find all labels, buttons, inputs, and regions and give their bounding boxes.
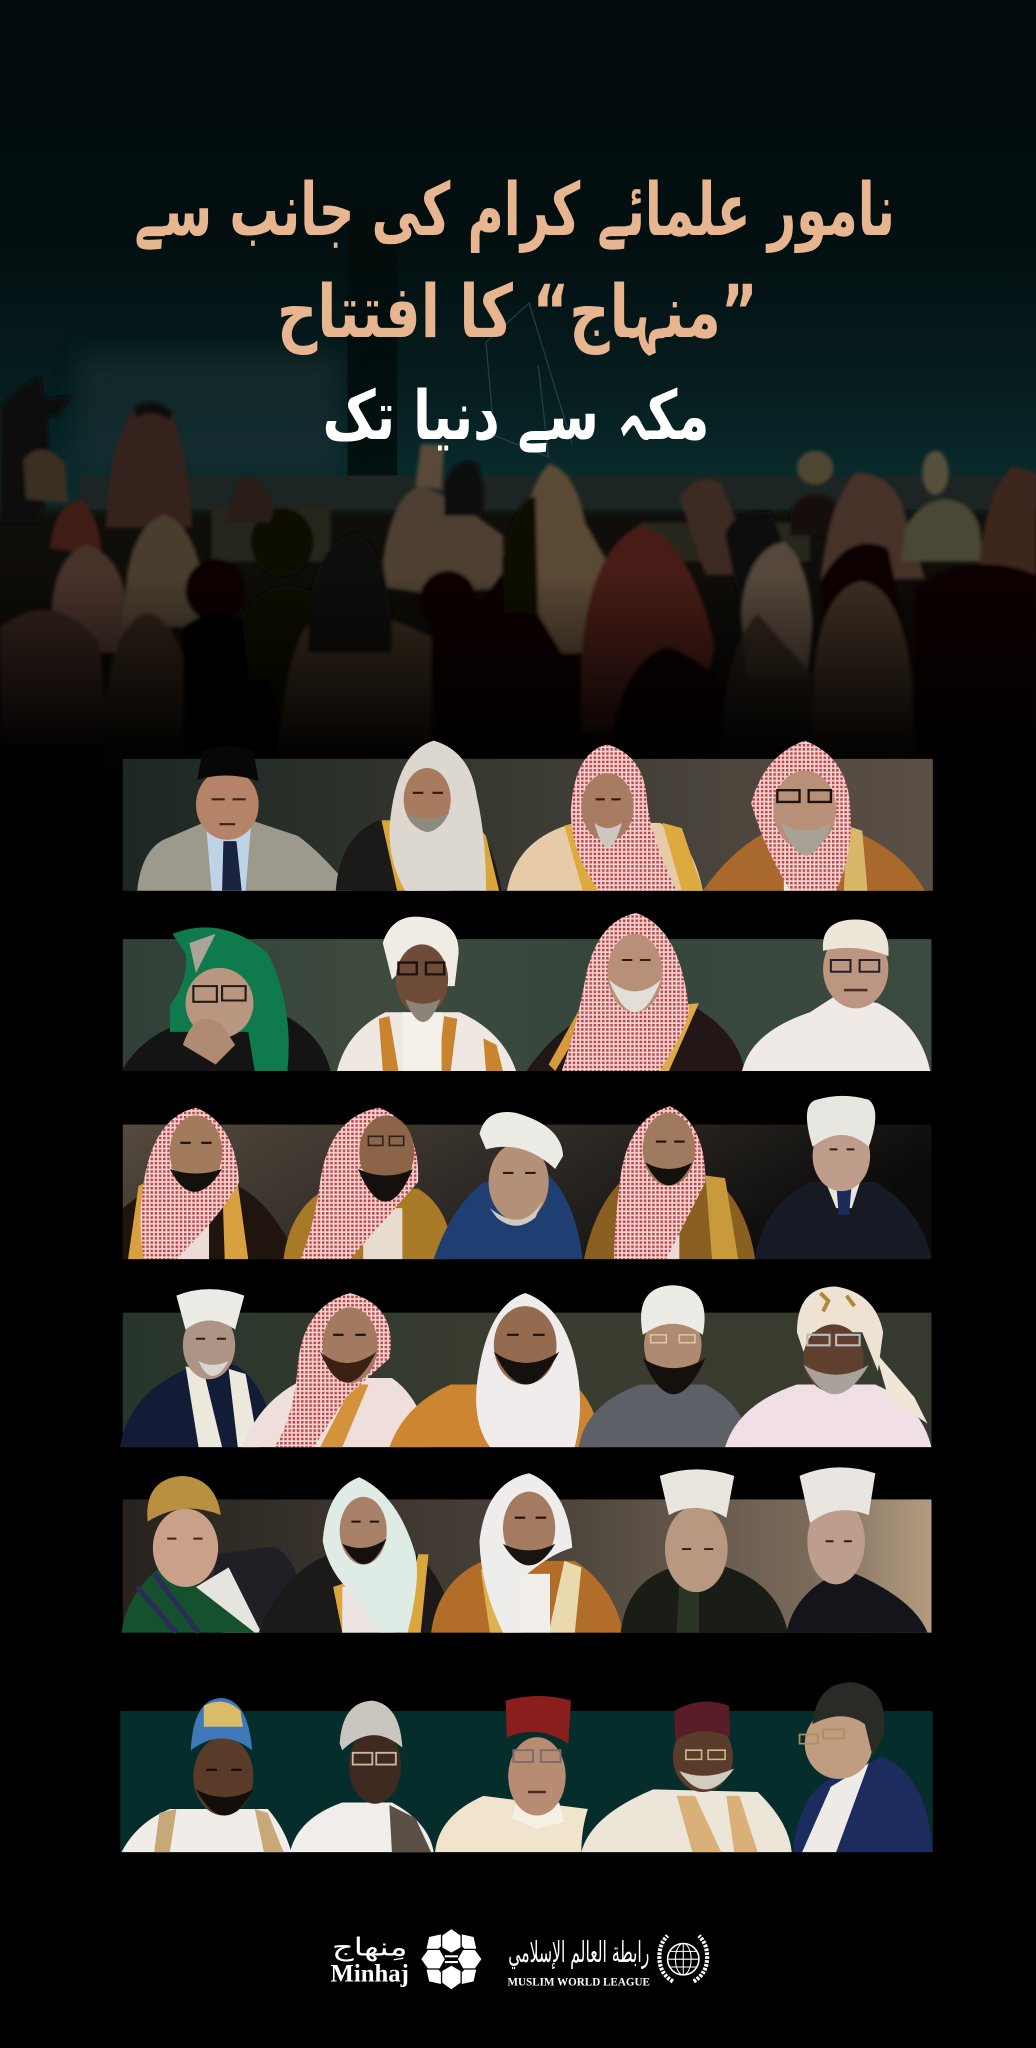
icon: Minhaj rosette: [421, 1929, 481, 1989]
scholar: red shemagh, glasses, brown robe: [703, 741, 925, 891]
scholar: cream cap, white robe: [742, 920, 930, 1071]
scholar: gold cap, green striped wrap: [121, 1476, 298, 1633]
scholar: grey hair, navy suit: [793, 1682, 933, 1852]
portrait row 5: [121, 1467, 931, 1633]
logo: Muslim World League: [508, 1935, 707, 1988]
icon: globe and wreath: [659, 1936, 707, 1981]
scholar: red shemagh, white beard: [526, 913, 745, 1071]
scholar: shemagh, black robe: [123, 1108, 298, 1259]
scholar: patterned turban, white robe, grey beard: [725, 1287, 931, 1447]
portrait row 4: [120, 1285, 931, 1447]
title line 2: ”منہاج“ کا افتتاح: [277, 270, 758, 356]
scholar: red fez, cream robe: [435, 1696, 588, 1852]
hero background: conference hall: [0, 0, 1036, 784]
right seated group: [797, 451, 834, 485]
scholar: white ghutra, orange robe: [431, 1473, 623, 1633]
scholar: black cap, grey suit: [137, 746, 353, 891]
scholar: white ghutra, black robe: [336, 741, 502, 891]
Minhaj Arabic wordmark: مِنهاج: [332, 1932, 408, 1962]
scholar: white hat, black suit: [755, 1096, 931, 1259]
scholar: white ghutra, orange robe: [389, 1293, 599, 1447]
bottom fade to black: [0, 575, 1036, 784]
left camera operator: [0, 376, 72, 522]
portrait row 2: [121, 913, 931, 1071]
MWL Arabic calligraphy: رابطة العالم الإسلامي: [508, 1935, 649, 1970]
scholar: white hat, black coat: [786, 1467, 928, 1633]
scholar: shemagh, gold robe: [584, 1106, 755, 1259]
portrait row 6: [120, 1682, 933, 1852]
Minhaj Latin wordmark: Minhaj: [331, 1960, 409, 1987]
MWL Latin wordmark: MUSLIM WORLD LEAGUE: [508, 1974, 650, 1988]
scholar: blue and yellow cap, tan bands: [121, 1698, 291, 1852]
scholar: green turban, hand on chin: [121, 927, 331, 1071]
audience silhouettes: [0, 376, 1036, 771]
scholar: grey cap, white robe: [290, 1701, 434, 1852]
scholar: white turban, blue robe: [434, 1112, 583, 1259]
subtitle: مکہ سے دنیا تک: [323, 377, 709, 456]
standing man: [106, 402, 192, 528]
centre seated group: [383, 486, 503, 594]
scholar: shemagh, white robe, brown beard: [242, 1293, 431, 1447]
portrait row 3: [123, 1096, 931, 1259]
scholar: white hat, navy coat, white scarf: [120, 1289, 277, 1447]
scholar: white hat, dark green coat: [621, 1469, 788, 1633]
scholar: white turban, grey robe, black beard: [579, 1285, 751, 1447]
scholar: white ghutra, black robe: [259, 1477, 452, 1633]
scholar: shemagh, gold robe, glasses: [283, 1108, 453, 1259]
logo: Minhaj: [331, 1929, 481, 1989]
stage floor: [78, 475, 1036, 509]
scholar: maroon cap, grey beard, cream robe: [581, 1702, 792, 1852]
scholar: white turban, white and orange robe: [337, 917, 516, 1071]
scholar: red shemagh, beige robe: [507, 744, 703, 891]
seats: [212, 507, 810, 562]
stage screens: [78, 209, 1036, 477]
portrait row 1: [123, 741, 933, 891]
